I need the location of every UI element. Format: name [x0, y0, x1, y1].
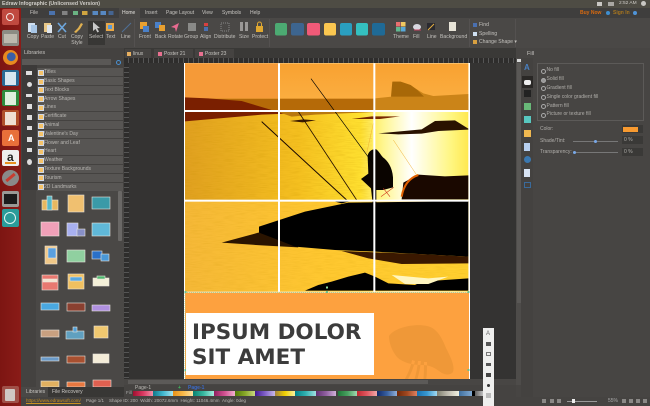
grid lines: [185, 63, 468, 292]
ribbon labels: Line: [427, 34, 437, 40]
text: Lines: [44, 104, 56, 110]
menu tabs: Page Layout: [166, 10, 194, 16]
search box: [22, 59, 111, 65]
horizontal scrollbar: [124, 379, 516, 385]
text: Tourism: [44, 175, 62, 181]
library bottom tabs: Libraries: [26, 389, 45, 395]
icon: software center: A: [8, 133, 14, 143]
icon: firefox: [3, 50, 18, 65]
library bottom tabs: File Recovery: [52, 389, 83, 395]
icon: software center: [2, 130, 19, 146]
icon: calc: [2, 90, 19, 106]
ribbon labels: Rotate: [168, 34, 183, 40]
icon: system tools: [2, 170, 19, 186]
text: Certificate: [44, 113, 67, 119]
launcher: [0, 8, 21, 406]
document tabs: Poster 21: [164, 51, 185, 57]
menu tabs: Buy Now: [580, 10, 601, 16]
icon: files: [2, 30, 19, 46]
ribbon labels: Select: [89, 34, 103, 40]
floating toolbar: [483, 328, 494, 406]
text: Text Blocks: [44, 87, 69, 93]
fill options box: No fill: [546, 67, 559, 73]
text: Basic Shapes: [44, 78, 75, 84]
poster page: [184, 63, 470, 379]
page tabs: Page-1: [188, 384, 204, 390]
fill heading: Fill: [527, 50, 534, 56]
menu tabs: Home: [122, 10, 135, 16]
ribbon labels: [27, 22, 517, 46]
status bar: [21, 397, 650, 406]
ribbon labels: Back: [155, 34, 166, 40]
document tabs: Poster 23: [205, 51, 226, 57]
photo: fisherman silhouette at sunset: [185, 63, 468, 292]
ribbon labels: Copy: [71, 34, 83, 40]
color palette: [124, 391, 516, 397]
ribbon labels: Fill: [413, 34, 420, 40]
menu tabs: View: [202, 10, 213, 16]
title bar: Edraw Infographic (Unlicensed Version): [2, 0, 100, 6]
color palette: Fill: [126, 390, 132, 395]
ribbon labels: Cut: [58, 34, 66, 40]
menu tabs: File: [30, 10, 38, 16]
ribbon labels: Theme: [393, 34, 409, 40]
menu tabs: Symbols: [222, 10, 241, 16]
panel: libraries: [21, 48, 124, 388]
document tabs: [124, 48, 516, 58]
icon: impress: [2, 110, 19, 126]
panel: fill: 0 %: [624, 137, 633, 143]
document tabs: linux: [133, 51, 143, 57]
ribbon labels: Line: [121, 34, 131, 40]
ribbon labels: Text: [106, 34, 115, 40]
text: 2D Landmarks: [44, 184, 77, 190]
ribbon labels: Change Shape ▾: [479, 39, 517, 45]
library list: [37, 68, 123, 191]
library bottom tabs: [21, 387, 124, 397]
fill options box: Single color gradient fill: [546, 94, 598, 100]
ribbon labels: Background: [440, 34, 467, 40]
text: Flower and Leaf: [44, 140, 80, 146]
fill options box: Picture or texture fill: [546, 111, 591, 117]
page tabs: Page-1: [135, 384, 151, 390]
text: Heart: [44, 148, 56, 154]
shape info: Page 1/1 Shape ID: 200 Width: 20072.6mm Height: 11046.4mm Angle: 0deg: [86, 398, 246, 403]
icon: jellyfish silhouette: [389, 325, 454, 386]
text: Valentine's Day: [44, 131, 78, 137]
ribbon labels: Distribute: [214, 34, 236, 40]
panel: building icon grid: [40, 191, 122, 387]
ribbon icons: [28, 19, 516, 47]
orange banner: [185, 292, 469, 380]
shade row: Shade/Tint:: [540, 138, 565, 144]
text: Texture Backgrounds: [44, 166, 91, 172]
ribbon labels: Spelling: [479, 30, 497, 36]
ribbon labels: Style: [71, 40, 83, 46]
fill options box: Pattern fill: [546, 102, 569, 108]
icon: trash: [2, 386, 19, 403]
side icon column: A: [524, 63, 530, 72]
icon: app teal: [2, 209, 19, 227]
fill options box: [537, 63, 644, 121]
vertical scrollbar: [516, 58, 521, 385]
title: IPSUM DOLOR: [192, 320, 361, 345]
category icons: [22, 65, 37, 190]
ribbon labels: Paste: [41, 34, 54, 40]
text: Weather: [44, 157, 63, 163]
canvas: [124, 63, 516, 385]
ruler: [124, 58, 516, 63]
icon: amazon: a: [7, 150, 14, 164]
icon: terminal: [2, 191, 19, 207]
ribbon labels: Group: [184, 34, 198, 40]
menu tabs: Insert: [145, 10, 158, 16]
icon: ubuntu: [2, 9, 19, 25]
page tabs: [124, 385, 516, 391]
panel: fill: 0 %: [624, 149, 633, 155]
text: Animal: [44, 122, 59, 128]
ribbon labels: Protect: [252, 34, 268, 40]
icon: writer: [2, 70, 19, 86]
page tabs: +: [178, 384, 181, 390]
website link: https://www.edrawsoft.com/: [26, 398, 81, 403]
menu tabs: [21, 8, 650, 18]
panel: fill: [521, 48, 650, 397]
text: Titles: [44, 69, 56, 75]
ribbon labels: Copy: [27, 34, 39, 40]
icon: search: [116, 60, 121, 64]
icon: amazon: [2, 150, 19, 166]
ribbon: [21, 18, 650, 48]
floating toolbar: A: [486, 331, 490, 337]
ribbon labels: Size: [239, 34, 249, 40]
title box: [186, 313, 374, 375]
fill options box: Solid fill: [546, 76, 564, 82]
zoom controls: 55%: [608, 398, 618, 404]
title bar: 2:52 AM: [619, 0, 637, 6]
ribbon labels: Align: [200, 34, 211, 40]
title: [192, 320, 361, 370]
title bar: [0, 0, 650, 8]
side icon column: [521, 58, 533, 397]
menu tabs: Sign In: [613, 10, 630, 16]
menu tabs: Help: [250, 10, 260, 16]
ribbon labels: Front: [139, 34, 151, 40]
libraries heading: Libraries: [24, 50, 45, 56]
text: Arrow Shapes: [44, 96, 75, 102]
color row: Color:: [540, 126, 553, 132]
fill options box: Gradient fill: [546, 84, 572, 90]
selection handles: [184, 286, 470, 379]
ribbon labels: Find: [479, 22, 489, 28]
transparency row: Transparency:: [540, 149, 572, 155]
title: SIT AMET: [192, 345, 305, 370]
